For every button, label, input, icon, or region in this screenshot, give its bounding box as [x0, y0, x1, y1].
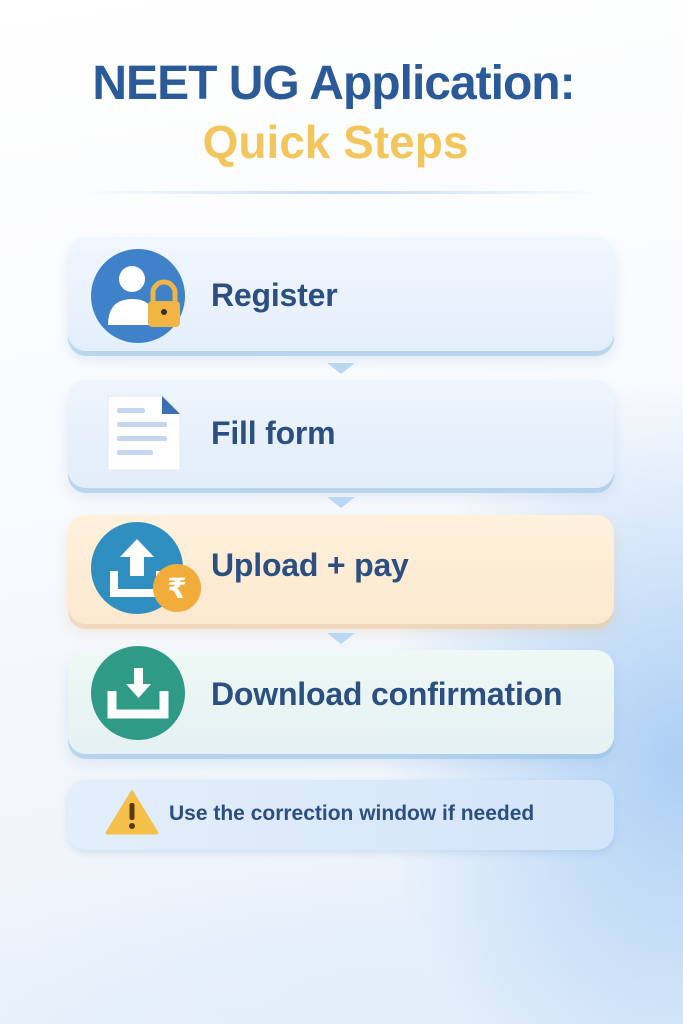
- icon: document: [108, 396, 180, 470]
- card: register: [68, 237, 614, 351]
- callout: correction note: [68, 780, 614, 850]
- card: upload pay: [68, 515, 614, 624]
- note text: Use the correction window if needed: [169, 802, 534, 825]
- label: Fill form: [211, 415, 335, 451]
- label: Register: [211, 277, 337, 313]
- icon: upload + rupee: ₹: [167, 572, 187, 605]
- title: Quick Steps: [203, 116, 468, 168]
- arrow: [327, 633, 355, 644]
- icon: upload + rupee: [91, 522, 201, 614]
- title: NEET UG Application:: [92, 57, 575, 110]
- icon: download: [91, 646, 185, 740]
- arrow: [327, 363, 355, 374]
- arrow: [327, 497, 355, 508]
- icon: user lock: [91, 249, 185, 343]
- title: [92, 57, 575, 168]
- card: fill form: [68, 380, 614, 488]
- icon: warning: [106, 790, 159, 834]
- label: Download confirmation: [211, 676, 562, 712]
- label: Upload + pay: [211, 547, 409, 583]
- card: download: [68, 650, 614, 754]
